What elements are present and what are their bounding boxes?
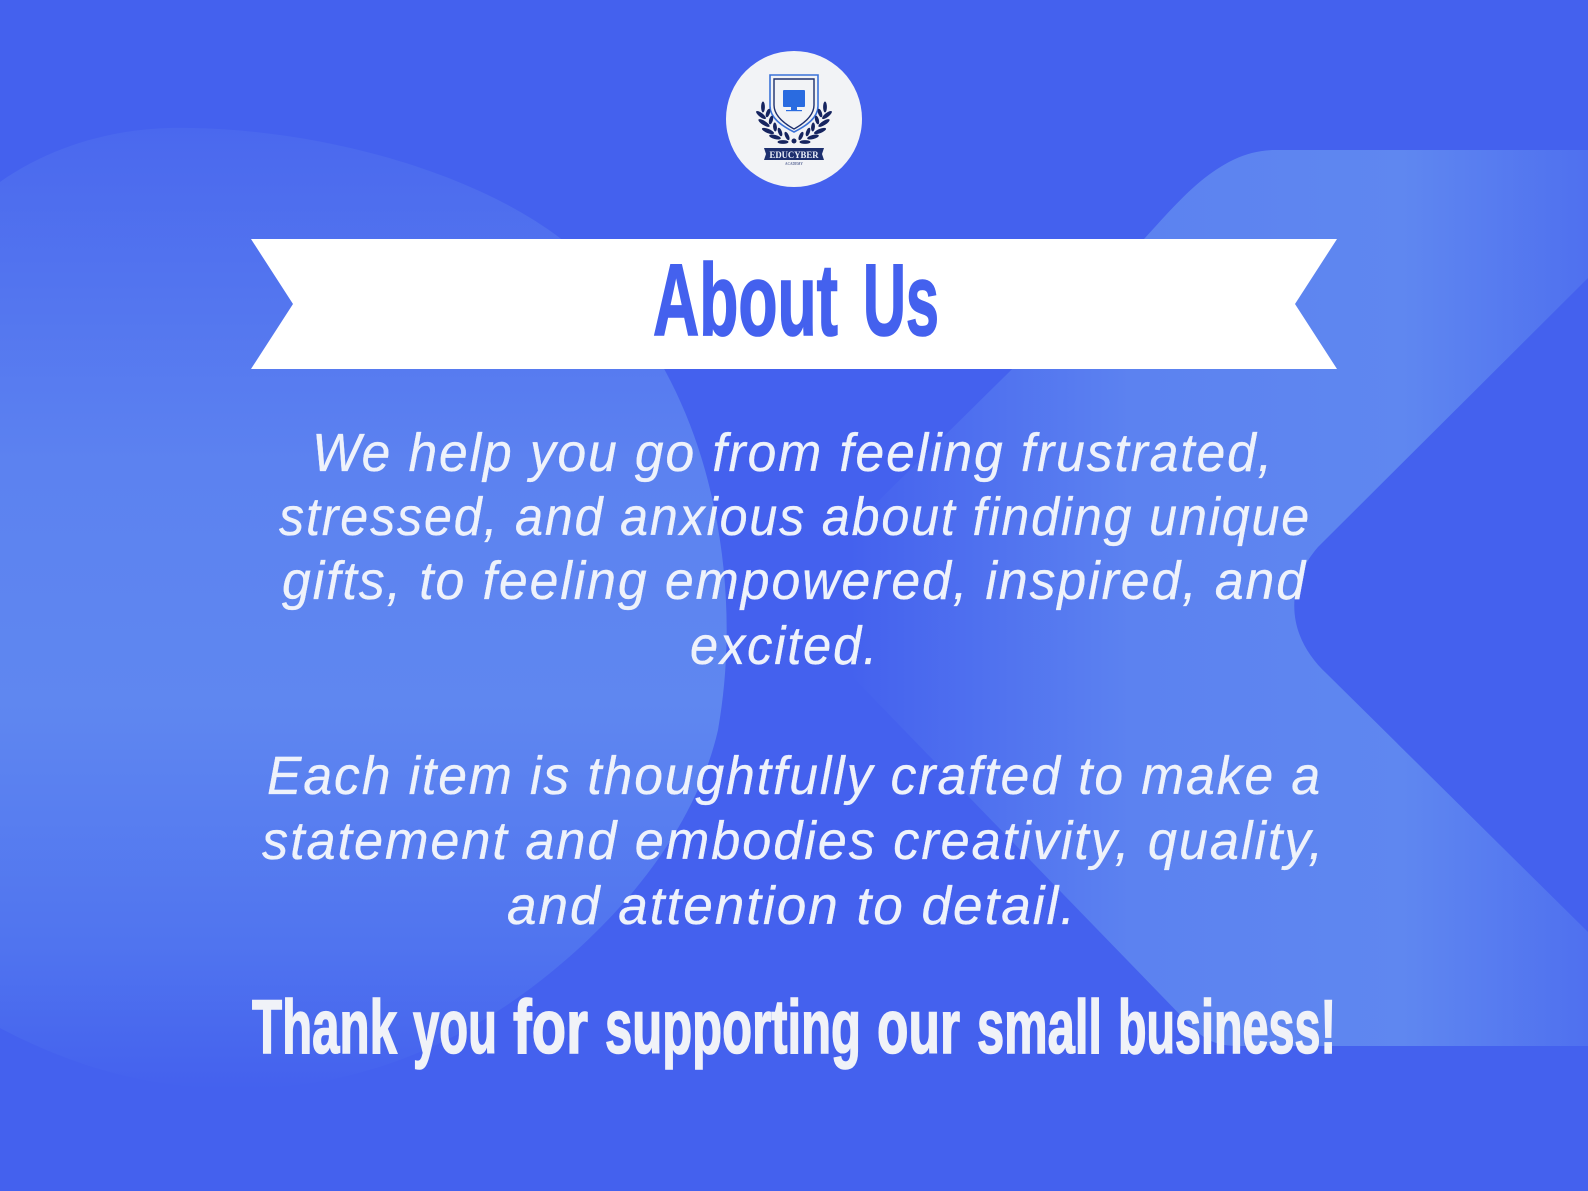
background shape: right chevron xyxy=(778,150,1588,1046)
paragraph: intro xyxy=(279,423,1311,676)
closing thank-you message: small xyxy=(977,985,1102,1070)
paragraph: craft statement xyxy=(262,746,1325,936)
icon: shield xyxy=(770,75,818,132)
closing thank-you message: Thank xyxy=(252,985,397,1070)
logo name ribbon: EDUCYBER xyxy=(770,151,819,161)
icon: laurel wreath xyxy=(755,102,833,144)
icon: monitor xyxy=(783,90,805,111)
paragraph: intro: excited. xyxy=(690,616,879,676)
closing thank-you message: supporting xyxy=(605,985,861,1070)
closing thank-you message: for xyxy=(513,985,588,1070)
logo badge xyxy=(726,51,862,187)
paragraph: intro: We help you go from feeling frustrated, xyxy=(312,423,1274,483)
paragraph: intro: gifts, to feeling empowered, inspired, and xyxy=(282,551,1307,611)
closing thank-you message: business! xyxy=(1118,985,1336,1070)
closing thank-you message: you xyxy=(413,985,497,1070)
title banner xyxy=(251,239,1337,369)
background shape: left blob xyxy=(0,128,727,1089)
logo subtitle: ACADEMY xyxy=(785,161,803,166)
paragraph: craft statement: and attention to detail. xyxy=(507,876,1077,936)
closing thank-you message: our xyxy=(877,985,960,1070)
closing thank-you message xyxy=(252,985,1336,1070)
heading: About Us: Us xyxy=(863,243,939,357)
paragraph: intro: stressed, and anxious about finding unique xyxy=(279,487,1311,547)
heading: About Us: About xyxy=(653,243,838,357)
paragraph: craft statement: Each item is thoughtfully crafted to make a xyxy=(267,746,1322,806)
paragraph: craft statement: statement and embodies creativity, quality, xyxy=(262,811,1325,871)
